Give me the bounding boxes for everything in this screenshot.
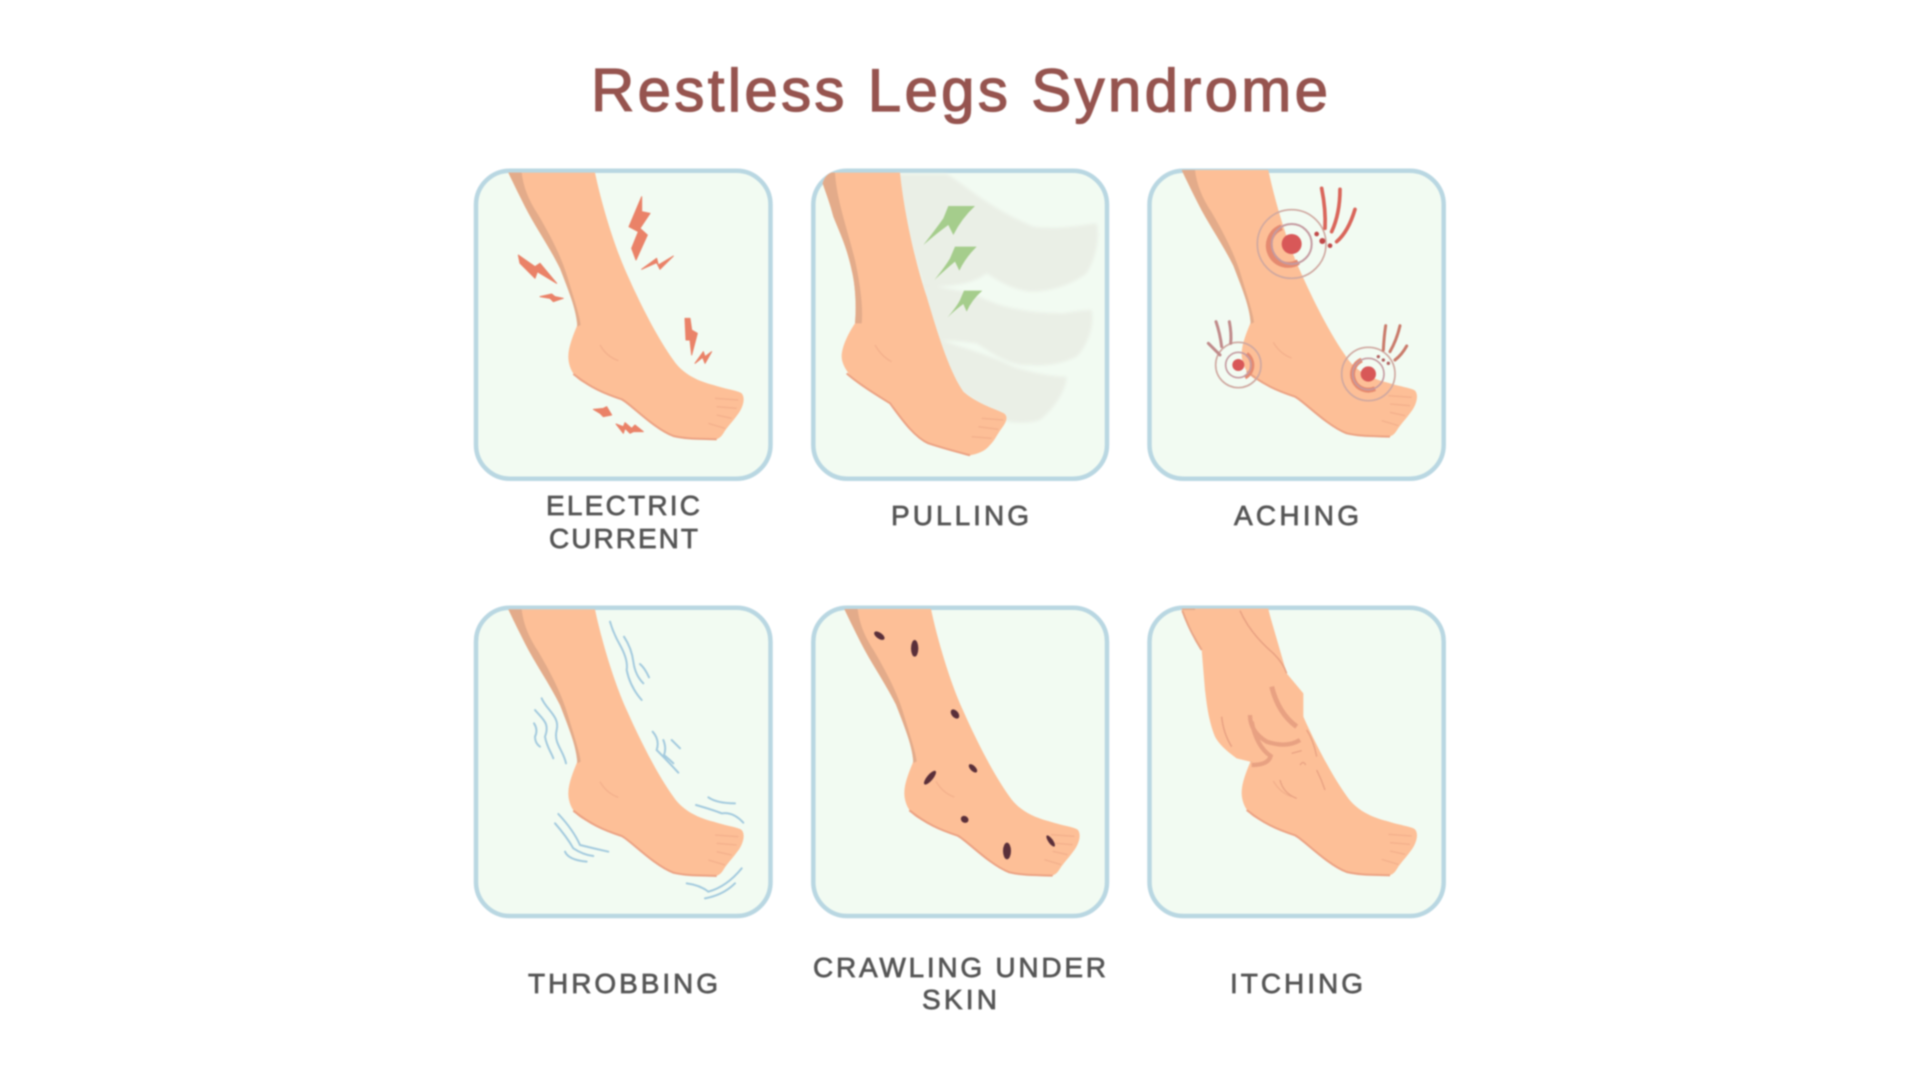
- label: itching: ITCHING: [1230, 968, 1363, 999]
- illustration: leg with scratching hand: [1182, 609, 1417, 876]
- illustration: leg with pain targets: [1182, 170, 1417, 437]
- title: Restless Legs Syndrome: [591, 57, 1328, 124]
- panel: electric current: [476, 171, 770, 479]
- panel: crawling under skin: [813, 608, 1107, 916]
- label: electric current: [546, 490, 700, 554]
- label: electric current: CURRENT: [549, 523, 698, 554]
- illustration: leg with bugs: [844, 609, 1080, 876]
- label: crawling under skin: CRAWLING UNDER: [813, 952, 1106, 983]
- label: throbbing: THROBBING: [528, 968, 718, 999]
- illustration: leg with blue waves: [508, 609, 744, 898]
- panel: aching: [1150, 170, 1444, 479]
- panel: pulling: [813, 171, 1107, 479]
- illustration: leg with lightning bolts: [508, 173, 744, 440]
- panel: itching: [1150, 608, 1444, 916]
- label: pulling: PULLING: [891, 500, 1029, 531]
- panel: throbbing: [476, 608, 770, 916]
- label: aching: ACHING: [1234, 500, 1359, 531]
- label: crawling under skin: SKIN: [922, 984, 997, 1015]
- label: crawling under skin: [813, 952, 1106, 1015]
- label: electric current: ELECTRIC: [546, 490, 700, 521]
- illustration: leg with ghost motion and green arrows: [823, 173, 1098, 455]
